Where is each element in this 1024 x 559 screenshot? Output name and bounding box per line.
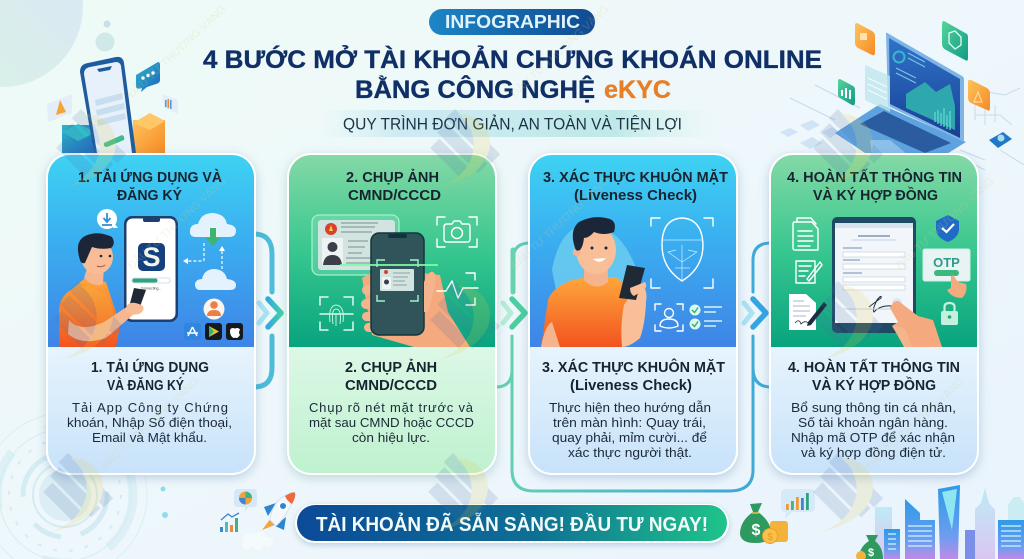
icon: profile scan with checks: [655, 304, 722, 331]
illustration: laptop with floating cards: [780, 21, 1024, 170]
step 4 heading: 4. HOÀN TẤT THÔNG TIN: [788, 358, 960, 376]
illustration: clouds and sync arrows: [183, 213, 236, 290]
step 1 heading: [92, 358, 208, 390]
step 4 heading: [788, 358, 960, 394]
step 1 heading: 1. TẢI ỨNG DỤNG: [91, 358, 209, 376]
illustration: man with phone: [59, 233, 146, 347]
watermark text: ĐẦU TƯ THƯƠNG VÀNG: [125, 3, 229, 100]
icon: signed paper with pen: [789, 294, 827, 330]
step 2 heading on image: [346, 168, 440, 200]
top badge: INFOGRAPHIC: INFOGRAPHIC: [445, 12, 580, 32]
step 1 heading on image: [78, 168, 222, 200]
watermark text: ĐẦU TƯ THƯƠNG VÀNG: [893, 175, 997, 272]
step 4 description: Số tài khoản ngân hàng.: [798, 415, 948, 430]
step 1 description: Tải App Công ty Chứng: [72, 400, 228, 415]
icon: user avatar: [204, 298, 224, 320]
watermark logos: [36, 109, 883, 532]
decorative corner circle: [0, 0, 83, 87]
step 1 description: Email và Mật khẩu.: [92, 430, 207, 445]
step 1 description: [67, 400, 232, 445]
illustration: money bag and coins: [740, 503, 788, 544]
step 3 heading: 3. XÁC THỰC KHUÔN MẶT: [542, 358, 725, 376]
illustration: man taking selfie: [541, 217, 646, 347]
icon: documents: [793, 218, 818, 250]
illustration: phone with floating icons: [47, 20, 178, 153]
step 3 description: trên màn hình: Quay trái,: [553, 415, 706, 430]
title: [203, 44, 822, 104]
step 2 heading: CMND/CCCD: [345, 378, 437, 394]
panel: step 4: [769, 153, 979, 475]
call to action banner: [295, 504, 729, 543]
illustration: ID card: [312, 215, 399, 275]
step 2 heading: [346, 358, 436, 390]
illustration: hand holding phone: [340, 233, 470, 347]
icon: OTP card: [923, 249, 970, 298]
arrow: step 2 to step 3: [496, 243, 729, 491]
panel: step 1: [46, 153, 256, 475]
illustration: phone with app: S: [142, 242, 161, 272]
step 1 description: khoán, Nhập Số điện thoại,: [67, 415, 232, 430]
illustration: city skyline: [875, 485, 1024, 559]
icons: app stores: [184, 323, 243, 340]
watermark text: ĐẦU TƯ THƯƠNG VÀNG: [863, 375, 967, 472]
icon: form with pen: [796, 261, 822, 283]
step 4 heading: VÀ KÝ HỢP ĐỒNG: [812, 376, 936, 394]
step 2 description: còn hiệu lực.: [352, 430, 430, 445]
step 2 heading on image: 2. CHỤP ẢNH: [346, 169, 439, 186]
call to action banner: TÀI KHOẢN ĐÃ SẴN SÀNG! ĐẦU TƯ NGAY!: [316, 513, 708, 536]
step 3 description: quay phải, mỉm cười... để: [552, 430, 707, 445]
illustration: bar chart bubble: [781, 489, 815, 519]
watermark text: [98, 3, 997, 472]
illustration: phone with app: Connecting...: [141, 286, 161, 290]
panel: step 3: [528, 153, 738, 475]
illustration: hand signing: [890, 301, 942, 347]
icon: OTP card: OTP: [933, 255, 960, 270]
step 2 heading: 2. CHỤP ẢNH: [345, 359, 437, 376]
arrow: step 3 to step 4: [729, 243, 771, 491]
icon: camera: [437, 217, 477, 247]
illustration: rocket with charts: [220, 489, 295, 550]
illustration: money bag and coins: $: [767, 532, 773, 543]
step 4 heading on image: VÀ KÝ HỢP ĐỒNG: [813, 186, 938, 204]
step 2 heading on image: CMND/CCCD: [348, 188, 441, 204]
step 1 heading: VÀ ĐĂNG KÝ: [107, 376, 184, 394]
subtitle band: QUY TRÌNH ĐƠN GIẢN, AN TOÀN VÀ TIỆN LỢI: [343, 114, 682, 134]
decorative rings bottom left: [0, 413, 147, 559]
step 3 description: Thực hiện theo hướng dẫn: [549, 400, 711, 415]
illustration: money bag and coins: $: [752, 522, 761, 539]
step 3 heading: (Liveness Check): [570, 378, 692, 394]
panel: step 2: [287, 153, 497, 475]
step 1 heading on image: ĐĂNG KÝ: [117, 186, 182, 204]
watermark text: ĐẦU TƯ THƯƠNG VÀNG: [508, 3, 612, 100]
watermark text: ĐẦU TƯ THƯƠNG VÀNG: [98, 375, 202, 472]
decorative dots: [160, 486, 168, 518]
step 3 heading on image: 3. XÁC THỰC KHUÔN MẶT: [543, 168, 728, 186]
icon: fingerprint scan: [320, 297, 353, 330]
step 3 heading on image: [543, 168, 728, 204]
step 2 description: [309, 400, 474, 445]
watermark text: ĐẦU TƯ THƯƠNG VÀNG: [125, 175, 229, 272]
title: eKYC: [604, 76, 671, 104]
illustration: small money bag: [856, 535, 883, 559]
step 4 description: Bổ sung thông tin cá nhân,: [791, 400, 956, 415]
subtitle band: [322, 110, 714, 137]
step 3 heading on image: (Liveness Check): [574, 188, 697, 204]
title: BẰNG CÔNG NGHỆ: [355, 74, 595, 104]
step 4 description: và ký hợp đồng điện tử.: [801, 445, 946, 460]
step 2 description: mặt sau CMND hoặc CCCD: [309, 415, 474, 430]
step 3 description: [549, 400, 711, 460]
step 4 heading on image: [787, 168, 962, 204]
title: 4 BƯỚC MỞ TÀI KHOẢN CHỨNG KHOÁN ONLINE: [203, 44, 822, 74]
watermark text: ĐẦU TƯ THƯƠNG VÀNG: [508, 175, 612, 272]
step 1 heading on image: 1. TẢI ỨNG DỤNG VÀ: [78, 168, 223, 186]
icon: face scan: [651, 218, 713, 288]
step 4 description: Nhập mã OTP để xác nhận: [791, 430, 955, 445]
icon: lock: [941, 303, 958, 325]
icon: pulse: [437, 273, 478, 305]
illustration: tablet with contract: [832, 217, 916, 333]
step 3 heading: [542, 358, 725, 394]
step 2 description: Chụp rõ nét mặt trước và: [309, 400, 474, 415]
illustration: phone with app: [124, 216, 178, 322]
step 3 description: xác thực người thật.: [568, 445, 692, 460]
arrow: step 1 to step 2: [254, 234, 281, 387]
top badge: INFOGRAPHIC: [429, 9, 595, 35]
step 4 heading on image: 4. HOÀN TẤT THÔNG TIN: [787, 168, 962, 186]
icon: shield: [936, 215, 959, 242]
icon: download bubble: [97, 209, 118, 229]
step 4 description: [791, 400, 956, 460]
illustration: small money bag: $: [868, 547, 874, 559]
